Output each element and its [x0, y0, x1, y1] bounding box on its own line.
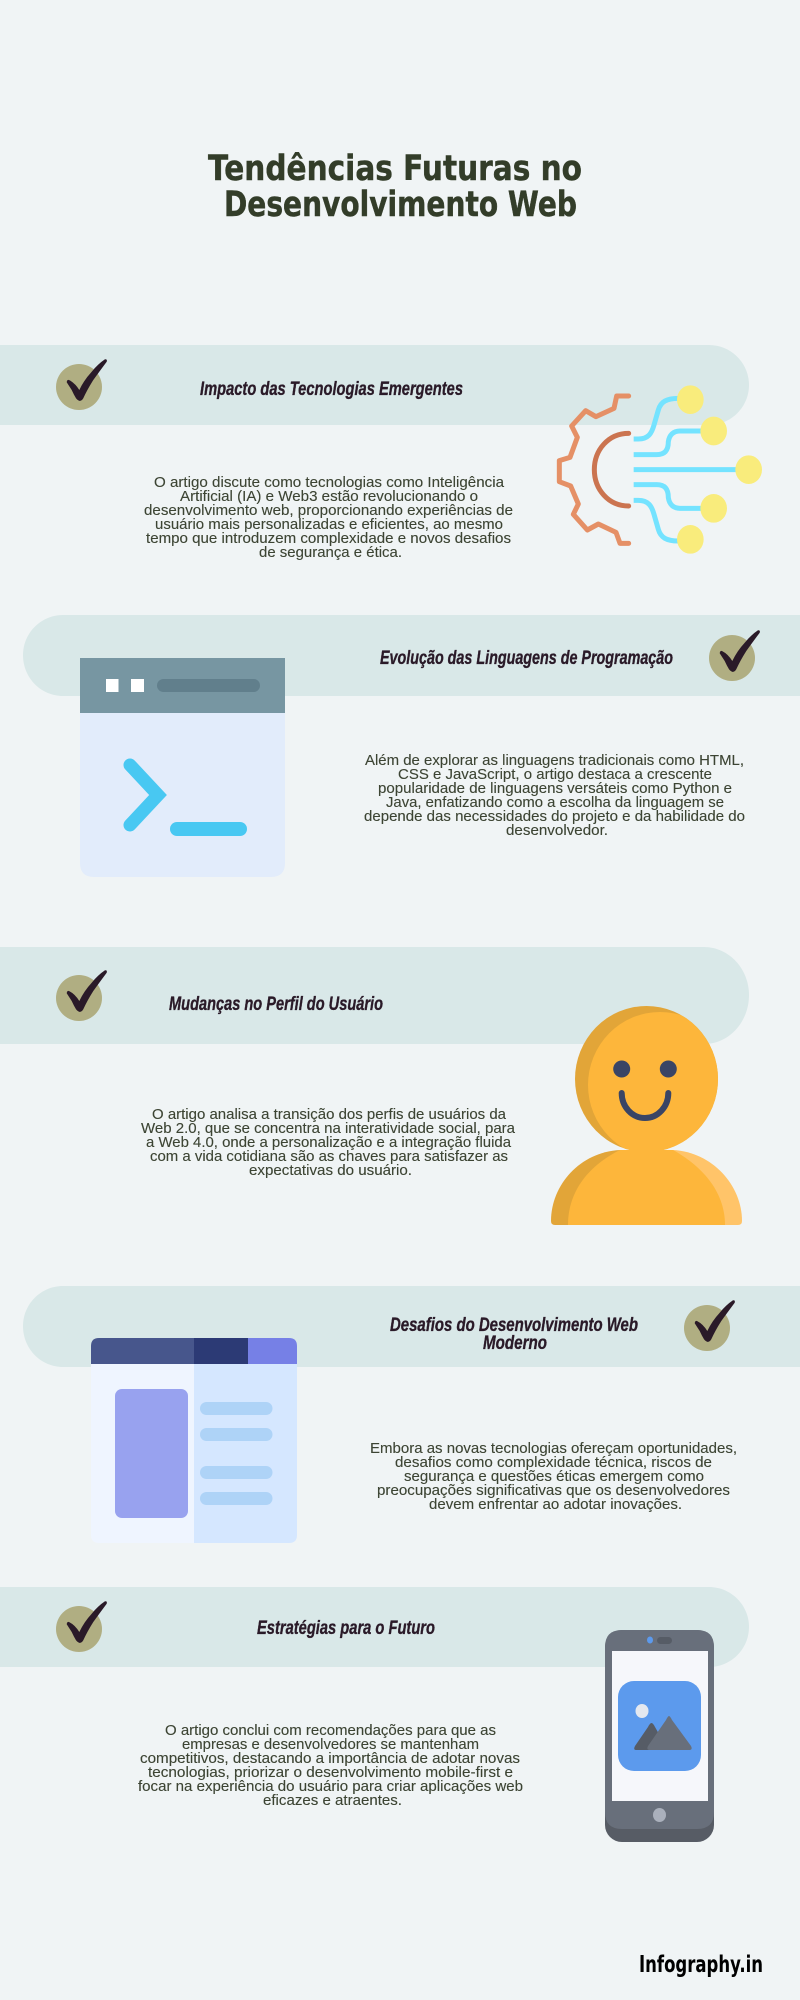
heading: section 4: Desafios do Desenvolvimento Web	[390, 1315, 638, 1336]
title: Tendências Futuras no	[208, 149, 582, 189]
text block: section 1: O artigo discute como tecnologias como Inteligência	[154, 475, 505, 491]
text block: section 2: depende das necessidades do projeto e da habilidade do	[364, 809, 745, 825]
text block: section 5: competitivos, destacando a importância de adotar novas	[140, 1751, 520, 1767]
icon: terminal window	[80, 658, 285, 877]
text block: section 1: Artificial (IA) e Web3 estão revolucionando o	[180, 489, 478, 505]
heading: section 4: Moderno	[483, 1333, 547, 1354]
text block: section 4: devem enfrentar ao adotar inovações.	[429, 1497, 682, 1513]
icon: layout window	[91, 1338, 297, 1543]
text block: section 5: eficazes e atraentes.	[263, 1793, 402, 1809]
panel: section 5 banner	[0, 1587, 749, 1667]
text block: section 1: tempo que introduzem complexidade e novos desafios	[146, 531, 511, 547]
text block: section 3: a Web 4.0, onde a personalização e a integração fluida	[146, 1135, 512, 1151]
panel: section 3 banner	[0, 947, 749, 1044]
text block: section 3: expectativas do usuário.	[249, 1163, 412, 1179]
text block: section 1	[144, 475, 513, 561]
text block: section 5	[138, 1723, 523, 1809]
heading: section 4	[390, 1315, 638, 1354]
text block: section 4	[370, 1441, 737, 1513]
heading: section 3: Mudanças no Perfil do Usuário	[169, 994, 383, 1015]
icon: gear with circuit lines	[559, 385, 762, 554]
text block: section 3: com a vida cotidiana são as chaves para satisfazer as	[150, 1149, 508, 1165]
panel: section 2 banner	[23, 615, 800, 696]
icon: check badge 4	[684, 1300, 735, 1351]
text block: section 3: O artigo analisa a transição dos perfis de usuários da	[152, 1107, 507, 1123]
heading: section 2: Evolução das Linguagens de Programação	[380, 648, 673, 669]
text block: section 1: de segurança e ética.	[259, 545, 402, 561]
panel: section 1 banner	[0, 345, 749, 425]
text block: section 2: Java, enfatizando como a escolha da linguagem se	[386, 795, 724, 811]
text block: section 4: desafios como complexidade técnica, riscos de	[395, 1455, 712, 1471]
heading: section 5: Estratégias para o Futuro	[257, 1618, 435, 1639]
text block: section 5: empresas e desenvolvedores se mantenham	[182, 1737, 479, 1753]
title: Desenvolvimento Web	[224, 185, 577, 225]
heading: section 1: Impacto das Tecnologias Emergentes	[200, 379, 463, 400]
icon: smiling user	[545, 1006, 745, 1230]
icon: check badge 3	[56, 970, 107, 1021]
panel: section 4 banner	[23, 1286, 800, 1367]
text block: section 3: Web 2.0, que se concentra na interatividade social, para	[141, 1121, 516, 1137]
icon: check badge 5	[56, 1601, 107, 1652]
text block: section 3	[141, 1107, 516, 1179]
text block: section 4: segurança e questões éticas emergem como	[404, 1469, 704, 1485]
text block: section 2	[364, 753, 745, 839]
icon: check badge 1	[56, 359, 107, 410]
icon: smartphone with image	[605, 1630, 714, 1842]
text block: section 2: Além de explorar as linguagens tradicionais como HTML,	[365, 753, 744, 769]
text block: section 5: tecnologias, priorizar o desenvolvimento mobile-first e	[148, 1765, 513, 1781]
text block: section 4: preocupações significativas que os desenvolvedores	[377, 1483, 730, 1499]
text block: section 2: popularidade de linguagens versáteis como Python e	[378, 781, 732, 797]
text block: section 2: desenvolvedor.	[506, 823, 608, 839]
title	[208, 149, 582, 225]
text block: section 5: focar na experiência do usuário para criar aplicações web	[138, 1779, 523, 1795]
text block: section 5: O artigo conclui com recomendações para que as	[165, 1723, 496, 1739]
text block: section 4: Embora as novas tecnologias ofereçam oportunidades,	[370, 1441, 737, 1457]
icon: check badge 2	[709, 630, 760, 681]
text block: section 1: desenvolvimento web, proporcionando experiências de	[144, 503, 513, 519]
text block: section 1: usuário mais personalizadas e eficientes, ao mesmo	[155, 517, 503, 533]
text block: section 2: CSS e JavaScript, o artigo destaca a crescente	[398, 767, 712, 783]
